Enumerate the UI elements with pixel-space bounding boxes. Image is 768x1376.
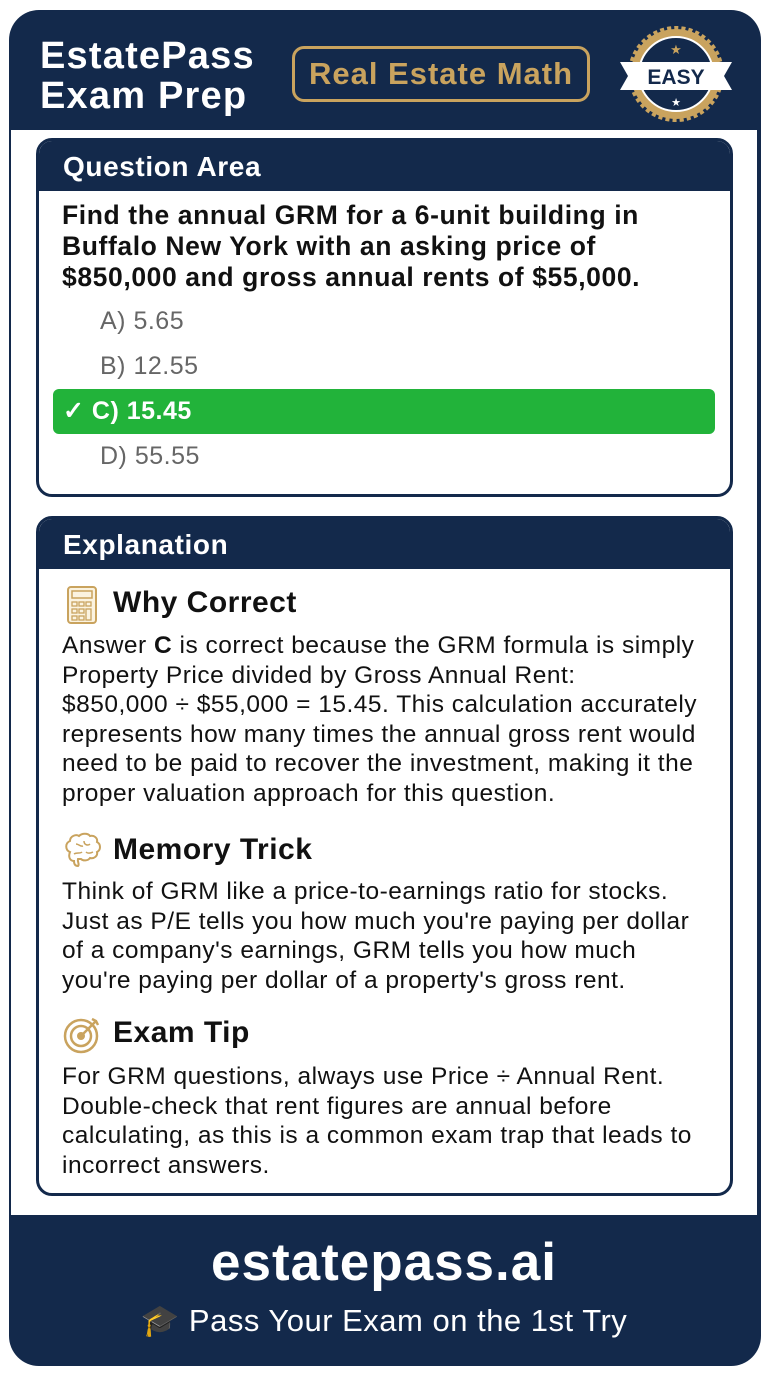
question text: Find the annual GRM for a 6-unit building in [62,200,639,230]
text: why correct: Answer C is correct because the GRM formula is simply [62,632,694,659]
panel: explanation [36,516,733,1196]
panel: explanation: Explanation [63,529,228,560]
option C correct: ✓ C) 15.45 [63,397,192,425]
text: why correct: proper valuation approach for this question. [62,780,555,806]
text: memory trick: you're paying per dollar of a property's gross rent. [62,966,626,994]
header title [40,35,255,117]
text: memory trick [62,878,689,994]
category badge: Real Estate Math [309,56,573,91]
text: why correct: need to be paid to recover the investment, making it the [62,750,693,777]
difficulty badge: ★ [670,42,682,57]
icon: brain [65,832,101,867]
icon: calculator [67,586,97,624]
text: exam tip: Double-check that rent figures are annual before [62,1092,612,1120]
heading: why correct: Why Correct [113,586,297,619]
footer tagline with graduation cap: 🎓 Pass Your Exam on the 1st Try [141,1303,627,1338]
text: exam tip: For GRM questions, always use Price ÷ Annual Rent. [62,1063,664,1090]
text: exam tip: calculating, as this is a common exam trap that leads to [62,1122,692,1149]
heading: memory trick: Memory Trick [113,833,312,866]
text: memory trick: Think of GRM like a price-to-earnings ratio for stocks. [62,878,668,905]
question text: $850,000 and gross annual rents of $55,000. [62,262,640,292]
question text [62,200,640,292]
text: memory trick: Just as P/E tells you how much you're paying per dollar [62,908,689,934]
white body [11,130,757,1215]
panel: question area: Question Area [63,151,261,182]
icon: target [64,1018,99,1054]
question text: Buffalo New York with an asking price of [62,231,596,261]
header title: EstatePass [40,35,255,77]
text: exam tip [62,1063,692,1178]
text: why correct: represents how many times the annual gross rent would [62,720,696,748]
text: why correct: Property Price divided by Gross Annual Rent: [62,662,576,688]
text: exam tip: incorrect answers. [62,1152,270,1178]
text: why correct: $850,000 ÷ $55,000 = 15.45. This calculation accurately [62,691,697,718]
option B: B) 12.55 [100,352,199,380]
heading: exam tip: Exam Tip [113,1016,250,1049]
option D: D) 55.55 [100,442,200,470]
text: memory trick: of a company's earnings, GRM tells you how much [62,937,636,964]
header title: Exam Prep [40,75,247,117]
category badge [292,46,590,102]
option A: A) 5.65 [100,307,184,335]
option C correct [53,389,715,434]
text: why correct [62,632,697,806]
panel: question area [36,138,733,497]
difficulty badge [620,26,732,122]
difficulty badge: EASY [647,66,705,89]
footer brand: estatepass.ai [211,1233,557,1292]
difficulty badge: ★ [671,97,681,109]
